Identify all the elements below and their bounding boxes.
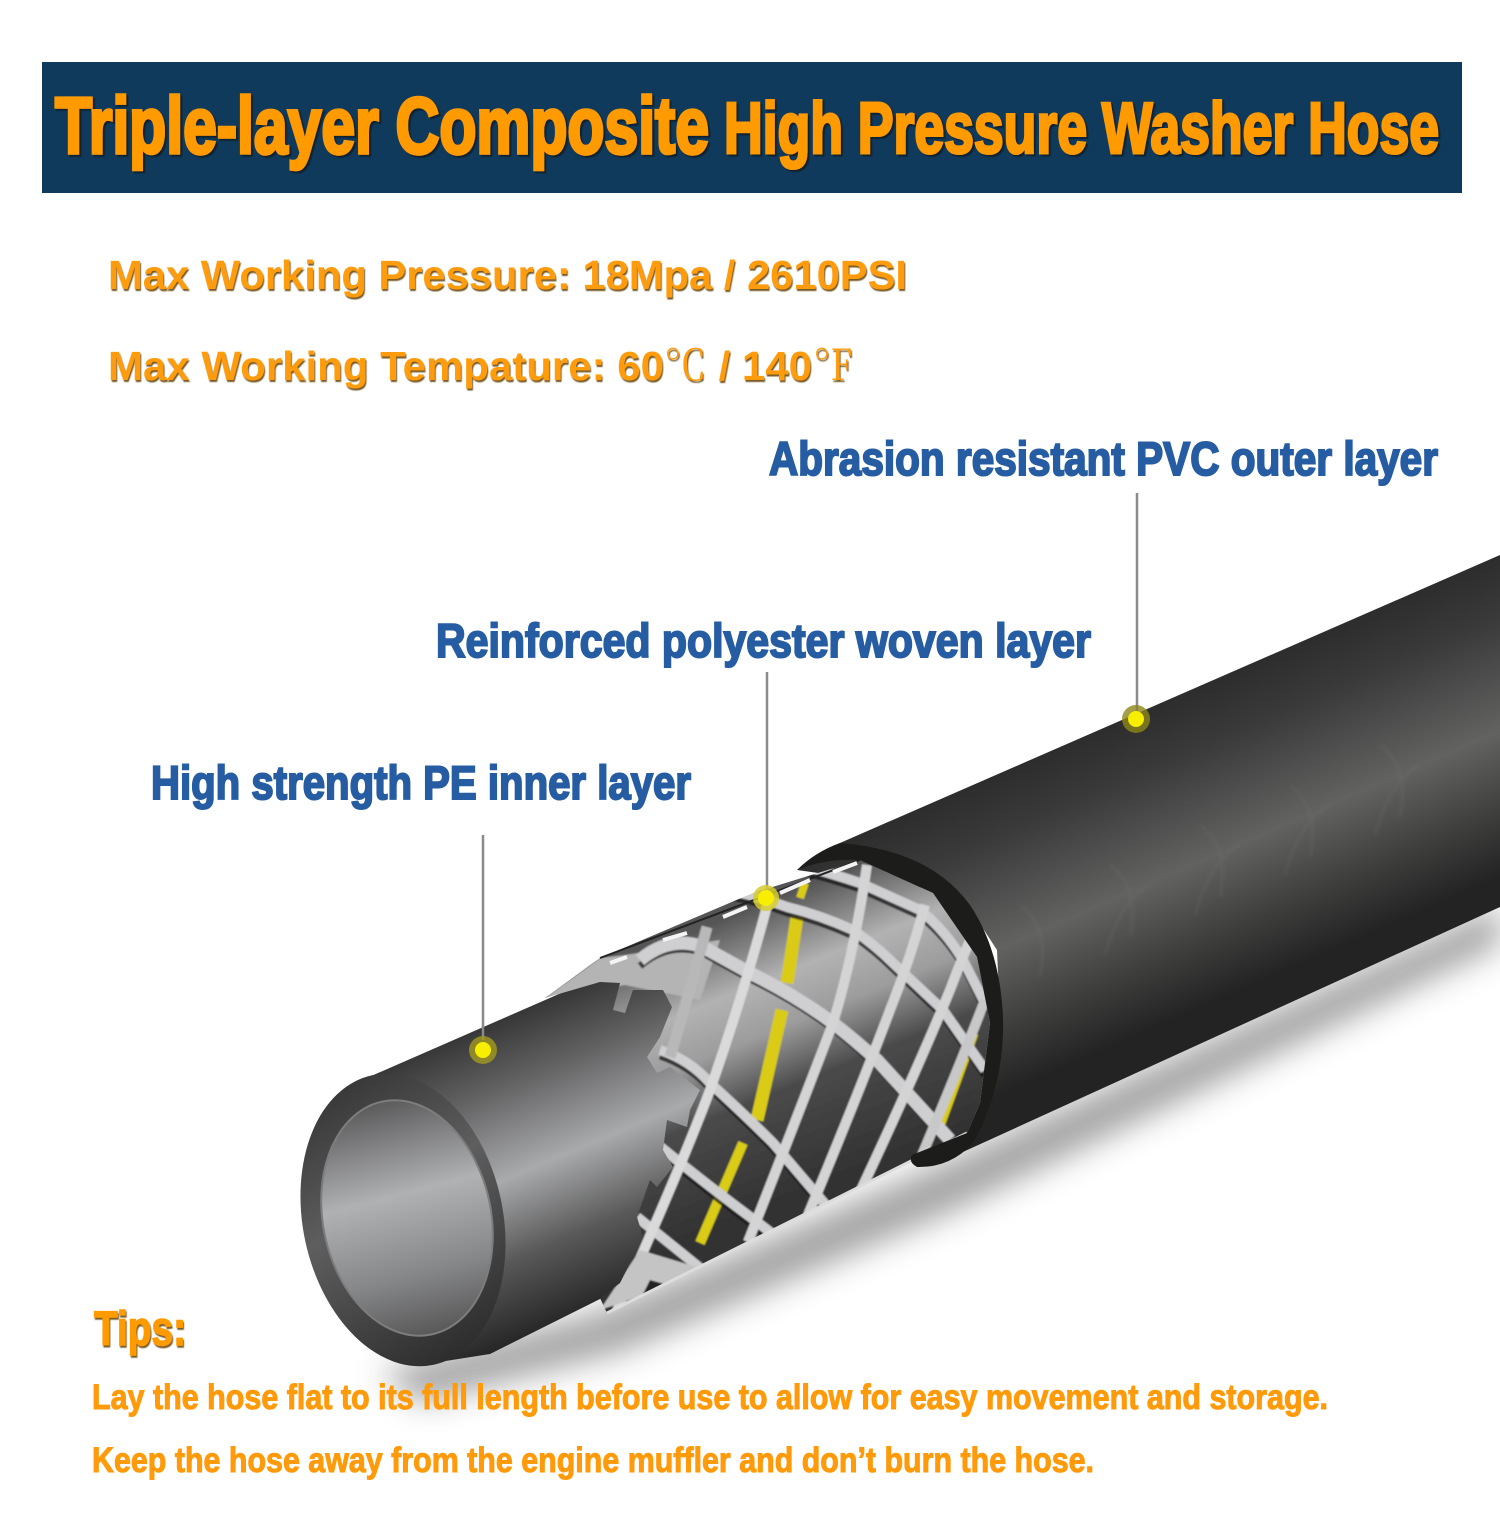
label: woven layer: Reinforced polyester woven layer	[436, 614, 1091, 667]
hose front end ring	[274, 1054, 532, 1386]
woven mesh layer	[545, 860, 990, 1313]
tips text: Lay the hose flat to its full length before use to allow for easy movement and storage.	[92, 1378, 1328, 1417]
tips text	[92, 1378, 1328, 1480]
leader: woven layer	[753, 672, 779, 911]
label: inner layer: High strength PE inner layer	[151, 756, 691, 809]
title banner	[42, 62, 1462, 193]
hose illustration	[274, 555, 1500, 1402]
leader: outer layer	[1122, 493, 1150, 733]
title banner: Triple-layer Composite	[55, 81, 709, 170]
tips heading: Tips:	[94, 1303, 186, 1356]
tips text: Keep the hose away from the engine muffler and don’t burn the hose.	[92, 1441, 1094, 1480]
spec: max working pressure: Max Working Pressure: 18Mpa / 2610PSI	[108, 252, 907, 298]
leader: inner layer	[469, 835, 497, 1064]
spec: max working temperature: Max Working Tempature: 60 ℃ / 140℉	[108, 333, 855, 393]
outer layer cut ring	[797, 843, 1003, 1167]
hose inner opening	[300, 1084, 514, 1352]
